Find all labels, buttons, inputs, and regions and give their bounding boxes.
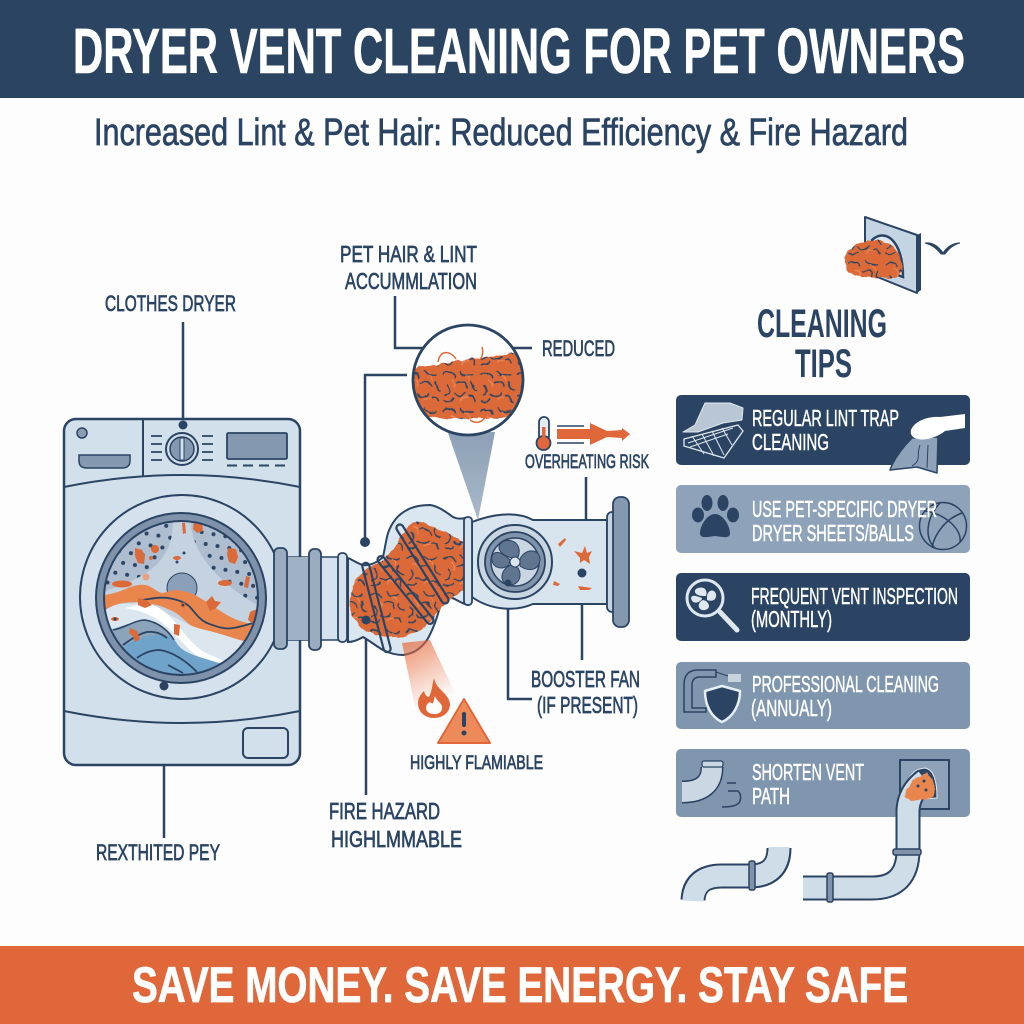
label: booster fan: BOOSTER FAN — [531, 666, 640, 692]
booster fan — [478, 525, 552, 599]
label: pet hair and lint accumulation: ACCUMMLATION — [345, 268, 477, 294]
text — [752, 405, 899, 455]
cleaning tips heading: TIPS — [795, 342, 852, 386]
text: (MONTHLY) — [751, 606, 832, 632]
icon: lint trap screen — [683, 403, 743, 458]
panel: shorten vent path — [676, 749, 970, 817]
door — [80, 495, 284, 699]
icon: pipe and shield — [684, 670, 741, 722]
icon: clogged wall vent — [845, 217, 921, 293]
icon: bird — [925, 243, 960, 254]
bulging duct — [348, 505, 468, 655]
text: (ANNUALY) — [751, 695, 832, 721]
drum with clothes — [105, 522, 257, 674]
lower access hatch — [243, 728, 288, 758]
label: clothes dryer: CLOTHES DRYER — [105, 291, 236, 316]
label: booster fan — [531, 666, 640, 718]
lint flecks — [111, 521, 261, 642]
label: pet hair and lint accumulation — [340, 241, 477, 294]
text: DRYER SHEETS/BALLS — [752, 520, 914, 546]
panel: pet-specific dryer sheets — [676, 485, 970, 553]
first duct section — [274, 548, 347, 650]
text: CLEANING — [752, 429, 829, 455]
dryer control button — [77, 428, 87, 438]
text: PATH — [752, 783, 790, 809]
magnifier cone — [448, 432, 495, 520]
icon: hand with cloth — [890, 414, 965, 473]
lint flecks in duct — [553, 538, 592, 590]
fan housing section — [472, 514, 607, 609]
label: fire hazard — [329, 798, 462, 852]
lint dispenser — [79, 455, 130, 468]
icon: left elbow pipe — [693, 847, 779, 901]
icon: heat arrow — [557, 423, 630, 445]
label: highly flammable: HIGHLY FLAMIABLE — [410, 753, 543, 774]
icon: heat glow from clog — [402, 640, 455, 707]
label: fire hazard: FIRE HAZARD — [329, 798, 440, 824]
diagram leader lines — [164, 296, 586, 838]
pale cloth — [106, 603, 244, 661]
icon: dryer ball — [920, 502, 966, 550]
cleaning tips heading — [757, 302, 887, 386]
drum ring — [96, 513, 266, 683]
label: fire hazard: HIGHLMMABLE — [331, 826, 462, 852]
text — [751, 671, 939, 721]
icon: warning triangle — [438, 699, 490, 743]
icon: elbow pipe — [682, 761, 741, 807]
label: overheating risk: OVERHEATING RISK — [525, 452, 649, 473]
clothes dryer illustration — [64, 419, 300, 765]
duct end flange — [607, 497, 629, 627]
label: pet hair and lint accumulation: PET HAIR & LINT — [340, 241, 477, 267]
lint clog — [350, 522, 477, 637]
panel: professional cleaning — [676, 662, 970, 729]
label: booster fan: (IF PRESENT) — [537, 692, 638, 718]
footer banner — [0, 946, 1024, 1024]
text — [751, 583, 958, 632]
vent duct with lint clog — [274, 497, 629, 655]
cleaning tips heading: CLEANING — [757, 302, 887, 346]
text — [752, 759, 864, 809]
duct bands — [362, 523, 450, 653]
icon: thermometer — [536, 417, 550, 450]
label: reduced: REDUCED — [542, 336, 615, 361]
leader dots — [360, 537, 586, 624]
title banner — [0, 0, 1024, 98]
icon: flame — [418, 678, 450, 718]
control knob — [151, 433, 213, 465]
text: SHORTEN VENT — [752, 759, 864, 785]
display screen — [227, 433, 287, 466]
blue cloth — [112, 623, 220, 674]
text: REGULAR LINT TRAP — [752, 405, 899, 431]
orange cloth — [104, 585, 254, 642]
lint magnifier circle — [408, 325, 530, 435]
icon: right vent pipe into wall — [803, 760, 949, 902]
leader dots — [160, 420, 188, 690]
icon: magnifier with fan — [687, 580, 737, 630]
text — [752, 496, 937, 546]
panel: frequent vent inspection — [676, 573, 970, 641]
label: rexthited pey: REXTHITED PEY — [96, 840, 220, 865]
icon: paw print — [692, 495, 739, 537]
panel: regular lint trap cleaning — [676, 395, 970, 473]
